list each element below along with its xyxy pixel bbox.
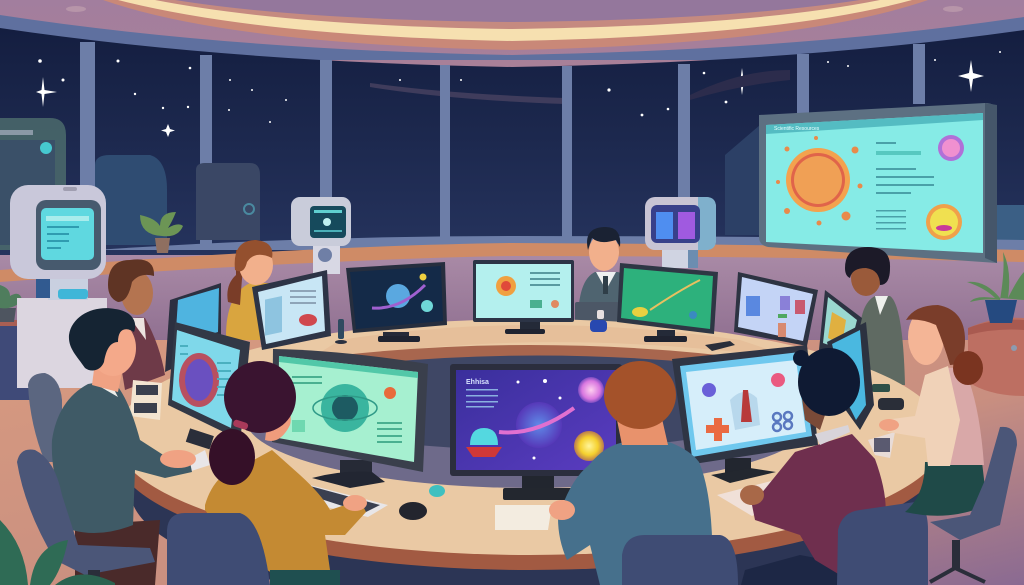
left cabinet with plant xyxy=(0,285,40,400)
kiosk: left robot terminal xyxy=(10,185,107,388)
kiosk: centre-right terminal xyxy=(645,197,716,268)
stars xyxy=(36,51,1001,137)
text: screen heading: Ehhisa xyxy=(466,379,489,386)
text: display title: Scientific Resources xyxy=(774,126,820,132)
icon: red cross xyxy=(706,418,729,441)
chair: front third xyxy=(622,535,738,585)
round desk xyxy=(115,319,945,585)
monitor: green orbit xyxy=(617,263,718,342)
monitor: central planet screen xyxy=(450,364,622,500)
person: back-left girl xyxy=(226,240,290,340)
kiosk: centre-left terminal xyxy=(291,197,351,274)
monitor: medical screen, right front xyxy=(672,345,818,483)
large wall display xyxy=(759,103,997,263)
monitor: planet on navy xyxy=(346,262,447,342)
foreground plant xyxy=(0,520,115,585)
chair: right office chair xyxy=(930,427,1017,582)
ceiling xyxy=(0,0,1024,80)
person: back-left boy xyxy=(108,259,165,390)
window ledge xyxy=(0,243,1024,282)
person: dark-haired man in jacket xyxy=(52,308,196,585)
desk centre well xyxy=(245,345,815,488)
mullions xyxy=(80,42,925,257)
text block lines xyxy=(876,142,934,230)
icon: sun diagram xyxy=(776,136,862,226)
person: red-haired student xyxy=(549,361,712,585)
ghost reflections in glass xyxy=(0,118,66,250)
monitor: yellow chart xyxy=(819,290,862,362)
monitor: blue panel far left xyxy=(165,283,221,372)
icon: pink circle xyxy=(938,135,964,161)
icon: link rings xyxy=(773,412,792,431)
person: girl in mustard sweater xyxy=(205,361,367,585)
monitor: sun on aqua xyxy=(473,260,574,334)
chair: left rear xyxy=(28,373,62,462)
desk papers and keypads xyxy=(130,380,895,530)
icon: yellow face xyxy=(926,204,962,240)
window wall with night sky xyxy=(0,15,1024,262)
icon: bottle under dome xyxy=(730,390,760,430)
monitor: girl's document screen xyxy=(252,270,331,350)
person: centre suited man xyxy=(575,227,640,326)
chair: front second xyxy=(167,513,270,585)
right cabinet with plant xyxy=(967,252,1024,396)
icon: ufo xyxy=(466,428,502,457)
chair: front fourth xyxy=(837,502,928,585)
plant on window sill xyxy=(140,212,183,253)
person: woman with ponytail on right xyxy=(879,305,987,516)
monitor: green cell diagram xyxy=(272,349,428,488)
monitor: blue side, right xyxy=(827,322,874,430)
person: back-right man with afro xyxy=(845,247,905,385)
desk items: mice, pen holder, blue device xyxy=(335,310,904,520)
person: student in maroon sweater xyxy=(740,348,890,585)
icon: ringed planet xyxy=(499,402,574,448)
floor xyxy=(0,340,1024,585)
chair: left front xyxy=(17,450,155,585)
monitor: cards xyxy=(734,272,818,346)
wall below the windows xyxy=(0,255,1024,345)
monitor: cell diagram, left side xyxy=(168,322,250,449)
